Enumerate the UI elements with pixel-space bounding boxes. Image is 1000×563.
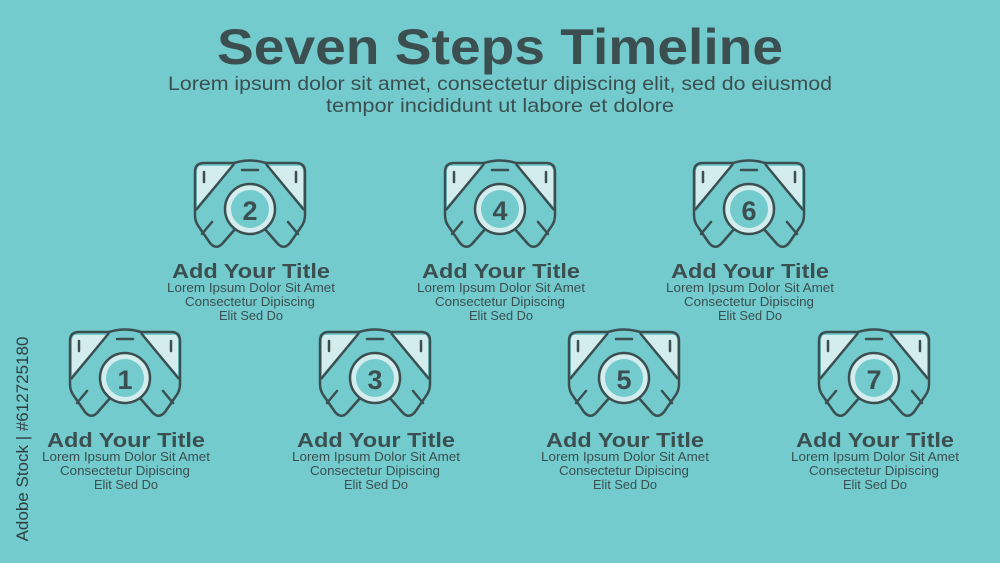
subtitle: tempor incididunt ut labore et dolore (326, 95, 674, 117)
step 5: Add Your Title (546, 430, 704, 452)
step 4: Consectetur Dipiscing (435, 295, 565, 309)
step 7 (791, 330, 960, 492)
step 4 (417, 160, 586, 323)
title: Seven Steps Timeline (217, 19, 783, 75)
step 7: Elit Sed Do (843, 478, 907, 492)
step 5 (541, 330, 710, 492)
step 2: Lorem Ipsum Dolor Sit Amet (167, 281, 336, 295)
step 2 (167, 160, 336, 323)
step 7: Lorem Ipsum Dolor Sit Amet (791, 450, 960, 464)
step 3: Add Your Title (297, 430, 455, 452)
step 4: 4 (492, 196, 508, 226)
subtitle: Lorem ipsum dolor sit amet, consectetur dipiscing elit, sed do eiusmod (168, 73, 832, 95)
step 1: 1 (117, 365, 133, 395)
step 6: Add Your Title (671, 261, 829, 283)
step 6: Elit Sed Do (718, 309, 782, 323)
step 3: Lorem Ipsum Dolor Sit Amet (292, 450, 461, 464)
step 2: Consectetur Dipiscing (185, 295, 315, 309)
step 3 (292, 330, 461, 492)
step 7: Consectetur Dipiscing (809, 464, 939, 478)
step 5: Consectetur Dipiscing (559, 464, 689, 478)
step 3: Consectetur Dipiscing (310, 464, 440, 478)
step 1: Add Your Title (47, 430, 205, 452)
step 3: 3 (367, 365, 383, 395)
step 7: Add Your Title (796, 430, 954, 452)
step 4: Add Your Title (422, 261, 580, 283)
step 5: Lorem Ipsum Dolor Sit Amet (541, 450, 710, 464)
step 6: Lorem Ipsum Dolor Sit Amet (666, 281, 835, 295)
step 1: Elit Sed Do (94, 478, 158, 492)
step 3: Elit Sed Do (344, 478, 408, 492)
step 1 (42, 330, 211, 492)
step 1: Consectetur Dipiscing (60, 464, 190, 478)
watermark id: Adobe Stock | #612725180 (13, 337, 32, 541)
step 2: Elit Sed Do (219, 309, 283, 323)
step 5: 5 (616, 365, 632, 395)
step 1: Lorem Ipsum Dolor Sit Amet (42, 450, 211, 464)
step 6: Consectetur Dipiscing (684, 295, 814, 309)
step 5: Elit Sed Do (593, 478, 657, 492)
step 6: 6 (741, 196, 757, 226)
step 2: 2 (242, 196, 258, 226)
step 4: Lorem Ipsum Dolor Sit Amet (417, 281, 586, 295)
step 7: 7 (866, 365, 882, 395)
step 6 (666, 160, 835, 323)
subtitle (168, 73, 832, 117)
step 2: Add Your Title (172, 261, 330, 283)
step 4: Elit Sed Do (469, 309, 533, 323)
